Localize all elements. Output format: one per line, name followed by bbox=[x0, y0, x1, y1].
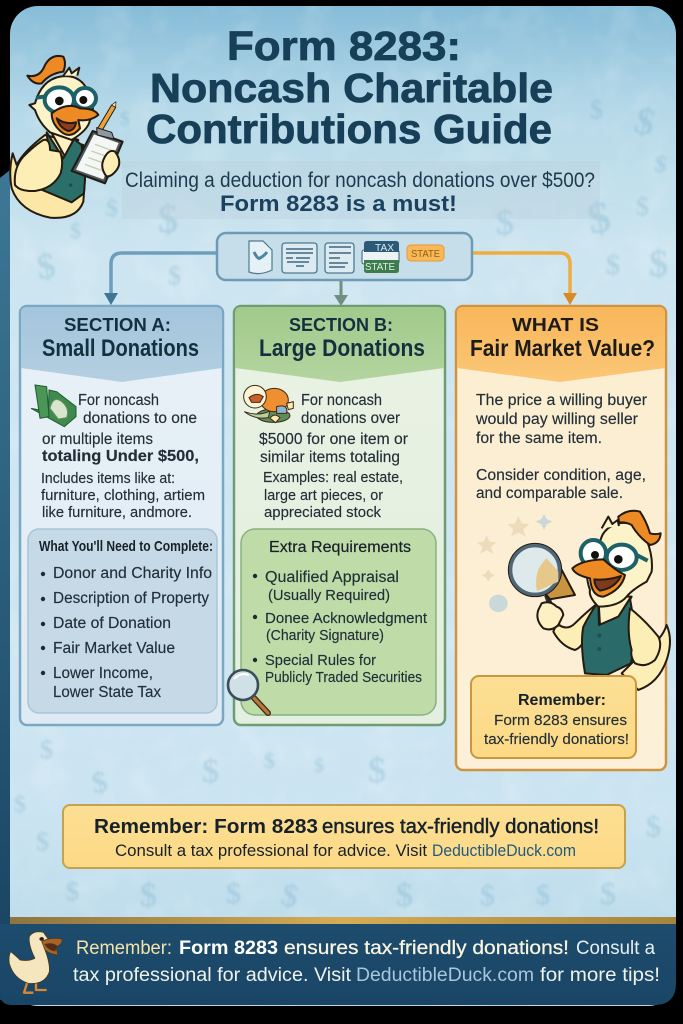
checklist: what you'll need: Lower Income, bbox=[53, 665, 153, 682]
background card: $ bbox=[653, 151, 669, 179]
icon: tablet sheet bbox=[325, 243, 354, 273]
duck hair bbox=[618, 511, 661, 545]
background card: $ bbox=[606, 250, 620, 281]
fair market value definition: The price a willing buyer bbox=[476, 392, 647, 409]
bottom reminder box bbox=[63, 805, 625, 868]
background card: $ bbox=[264, 748, 275, 773]
background card: $ bbox=[584, 192, 614, 244]
icon: magnifying glass bbox=[228, 670, 268, 713]
section A description: totaling Under $500, bbox=[42, 448, 199, 465]
extra requirements box bbox=[241, 529, 436, 715]
background card: $ bbox=[226, 877, 241, 910]
extra requirements box: (Usually Required) bbox=[268, 587, 390, 604]
icon: tax and state forms: STATE bbox=[365, 262, 395, 273]
arrow to section B bbox=[334, 280, 348, 306]
section B description bbox=[259, 392, 408, 521]
background card: $ bbox=[36, 827, 49, 856]
section A description: furniture, clothing, artiem bbox=[41, 487, 205, 504]
fair market value header: WHAT IS bbox=[512, 315, 599, 335]
mascot: duck with clipboard bbox=[10, 56, 123, 218]
footer reminder text bbox=[73, 938, 660, 986]
footer reminder text: Consult a bbox=[576, 938, 655, 959]
section B description: Examples: real estate, bbox=[263, 469, 403, 486]
background card: $ bbox=[396, 877, 413, 914]
extra requirements box: Qualified Appraisal bbox=[265, 569, 399, 586]
background card: $ bbox=[600, 875, 616, 911]
title: Noncash Charitable bbox=[150, 65, 553, 111]
duck beak bbox=[52, 106, 98, 135]
bottom reminder box: Consult a tax professional for advice. Visit bbox=[115, 841, 427, 860]
icon: form sheet bbox=[282, 243, 317, 273]
footer reminder text: tax professional for advice. Visit bbox=[73, 965, 352, 986]
duck vest bbox=[582, 598, 634, 675]
background card: $ bbox=[590, 95, 603, 124]
background card: $ bbox=[636, 192, 649, 221]
section A description: like furniture, andmore. bbox=[42, 504, 192, 521]
checklist: what you'll need: Date of Donation bbox=[53, 615, 171, 632]
section B description: appreciated stock bbox=[264, 504, 381, 521]
subtitle banner: Form 8283 is a must! bbox=[220, 191, 457, 216]
fair market value definition: for the same item. bbox=[476, 430, 602, 447]
section A description: For noncash bbox=[78, 392, 159, 409]
section B header bbox=[235, 307, 444, 382]
duck tail bbox=[622, 625, 670, 690]
footer reminder text: Form 8283 bbox=[179, 938, 278, 959]
section A header: Small Donations bbox=[42, 335, 199, 362]
background card: $ bbox=[646, 810, 661, 843]
duck left arm bbox=[553, 602, 600, 650]
background card: $ bbox=[158, 196, 178, 241]
icon: state tag bbox=[407, 245, 444, 261]
section A description: or multiple items bbox=[42, 431, 153, 448]
duck thumbs-up wing bbox=[15, 140, 62, 191]
panel: what is fair market value bbox=[456, 306, 670, 770]
mascot: duck with magnifying glass bbox=[477, 511, 670, 690]
section A description bbox=[41, 392, 205, 521]
background card: $ bbox=[168, 261, 181, 290]
duck shirt bbox=[598, 597, 632, 625]
icon: state tag: STATE bbox=[411, 248, 440, 260]
background card: $ bbox=[314, 755, 324, 777]
background card: $ bbox=[278, 876, 302, 914]
icon: duck with donation bag bbox=[244, 385, 293, 423]
checklist: what you'll need: Donor and Charity Info bbox=[53, 565, 212, 582]
background card: $ bbox=[140, 877, 157, 914]
background card: $ bbox=[202, 753, 219, 790]
section A description: donations to one bbox=[83, 410, 197, 427]
arrow to section A bbox=[104, 253, 217, 305]
section A description: Includes items like at: bbox=[41, 470, 175, 487]
checklist: what you'll need: Lower State Tax bbox=[53, 684, 161, 701]
background card: $ bbox=[66, 877, 79, 906]
bottom reminder box: Remember: Form 8283 bbox=[94, 816, 318, 838]
background card: $ bbox=[106, 196, 118, 222]
subtitle banner bbox=[122, 161, 600, 219]
fair market value definition bbox=[475, 392, 647, 502]
checklist: what you'll need: Fair Market Value bbox=[53, 640, 175, 657]
duck head bbox=[29, 76, 93, 140]
duck glasses bbox=[36, 87, 96, 113]
section B description: $5000 for one item or bbox=[259, 431, 408, 448]
background card: $ bbox=[120, 108, 130, 130]
title: Contributions Guide bbox=[146, 106, 552, 152]
background card: $ bbox=[496, 202, 514, 242]
remember callout bbox=[471, 676, 636, 758]
duck hand bbox=[537, 602, 563, 629]
section B description: donations over bbox=[301, 410, 400, 427]
clipboard bbox=[72, 131, 123, 183]
magnifying glass bbox=[508, 543, 575, 627]
bottom reminder box: ensures tax-friendly donations! bbox=[322, 816, 599, 838]
duck hair bbox=[27, 56, 65, 84]
duck right arm bbox=[629, 608, 660, 665]
section A header bbox=[21, 307, 222, 382]
subtitle banner: Claiming a deduction for noncash donations over $500? bbox=[125, 169, 595, 192]
title bbox=[146, 23, 553, 152]
footer reminder text: DeductibleDuck.com bbox=[356, 965, 534, 986]
background card: $ bbox=[40, 735, 53, 764]
extra requirements box: Extra Requirements bbox=[269, 539, 411, 556]
checklist: what you'll need bbox=[28, 529, 217, 713]
section B description: similar items totaling bbox=[260, 449, 400, 466]
background card: $ bbox=[536, 880, 550, 911]
background card: $ bbox=[14, 792, 26, 818]
icon: tax and state forms: TAX bbox=[375, 243, 394, 254]
extra requirements box: Publicly Traded Securities bbox=[265, 669, 422, 686]
fair market value header bbox=[457, 307, 665, 382]
gold divider bbox=[10, 917, 676, 924]
bottom reminder box: DeductibleDuck.com bbox=[432, 841, 576, 860]
section B description: For noncash bbox=[301, 392, 382, 409]
duck head bbox=[587, 523, 652, 607]
checklist: what you'll need: Description of Property bbox=[53, 590, 209, 607]
footer reminder text: Remember: bbox=[76, 938, 172, 959]
arrow to fair market value bbox=[472, 253, 577, 305]
footer band bbox=[0, 924, 676, 1005]
background card: $ bbox=[34, 245, 58, 287]
background card: $ bbox=[649, 243, 668, 285]
icon: donation box bbox=[31, 385, 76, 427]
duck beak bbox=[572, 559, 625, 597]
section A header: SECTION A: bbox=[64, 315, 171, 335]
duck shirt bbox=[50, 130, 78, 157]
section B description: large art pieces, or bbox=[264, 487, 383, 504]
remember callout: tax-friendly donatiors! bbox=[484, 731, 629, 748]
dark left edge strip bbox=[0, 170, 10, 1000]
panel: section A small donations bbox=[20, 306, 223, 725]
duck glasses bbox=[581, 540, 648, 570]
remember callout: Form 8283 ensures bbox=[494, 712, 627, 729]
fair market value definition: and comparable sale. bbox=[476, 485, 623, 502]
checklist: what you'll need: What You'll Need to Complete: bbox=[39, 538, 213, 555]
icon: footer duck bbox=[9, 932, 62, 993]
duck holding hand bbox=[102, 151, 119, 177]
decorative stars bbox=[477, 514, 553, 612]
background card: $ bbox=[480, 879, 495, 912]
background card: $ bbox=[630, 99, 660, 145]
remember callout: Remember: bbox=[518, 692, 606, 709]
forms icon box bbox=[217, 233, 472, 280]
panel: section B large donations bbox=[228, 306, 445, 725]
title: Form 8283: bbox=[227, 23, 461, 69]
extra requirements box: Donee Acknowledgment bbox=[265, 610, 428, 627]
fair market value definition: would pay willing seller bbox=[475, 411, 638, 428]
duck vest bbox=[38, 132, 85, 202]
duck body bbox=[10, 135, 85, 218]
fair market value definition: Consider condition, age, bbox=[476, 467, 646, 484]
icon: checked document bbox=[249, 241, 272, 274]
section B header: SECTION B: bbox=[289, 315, 393, 335]
footer reminder text: ensures tax-friendly donations! bbox=[284, 938, 569, 959]
fair market value header: Fair Market Value? bbox=[470, 335, 655, 361]
footer reminder text: for more tips! bbox=[540, 965, 660, 986]
section B header: Large Donations bbox=[259, 335, 425, 362]
pencil bbox=[97, 105, 116, 132]
background card: $ bbox=[368, 750, 386, 790]
background card: $ bbox=[89, 765, 110, 800]
icon: tax and state forms bbox=[362, 241, 399, 273]
extra requirements box: (Charity Signature) bbox=[266, 627, 384, 644]
extra requirements box: Special Rules for bbox=[265, 652, 376, 669]
background card: $ bbox=[70, 218, 81, 243]
